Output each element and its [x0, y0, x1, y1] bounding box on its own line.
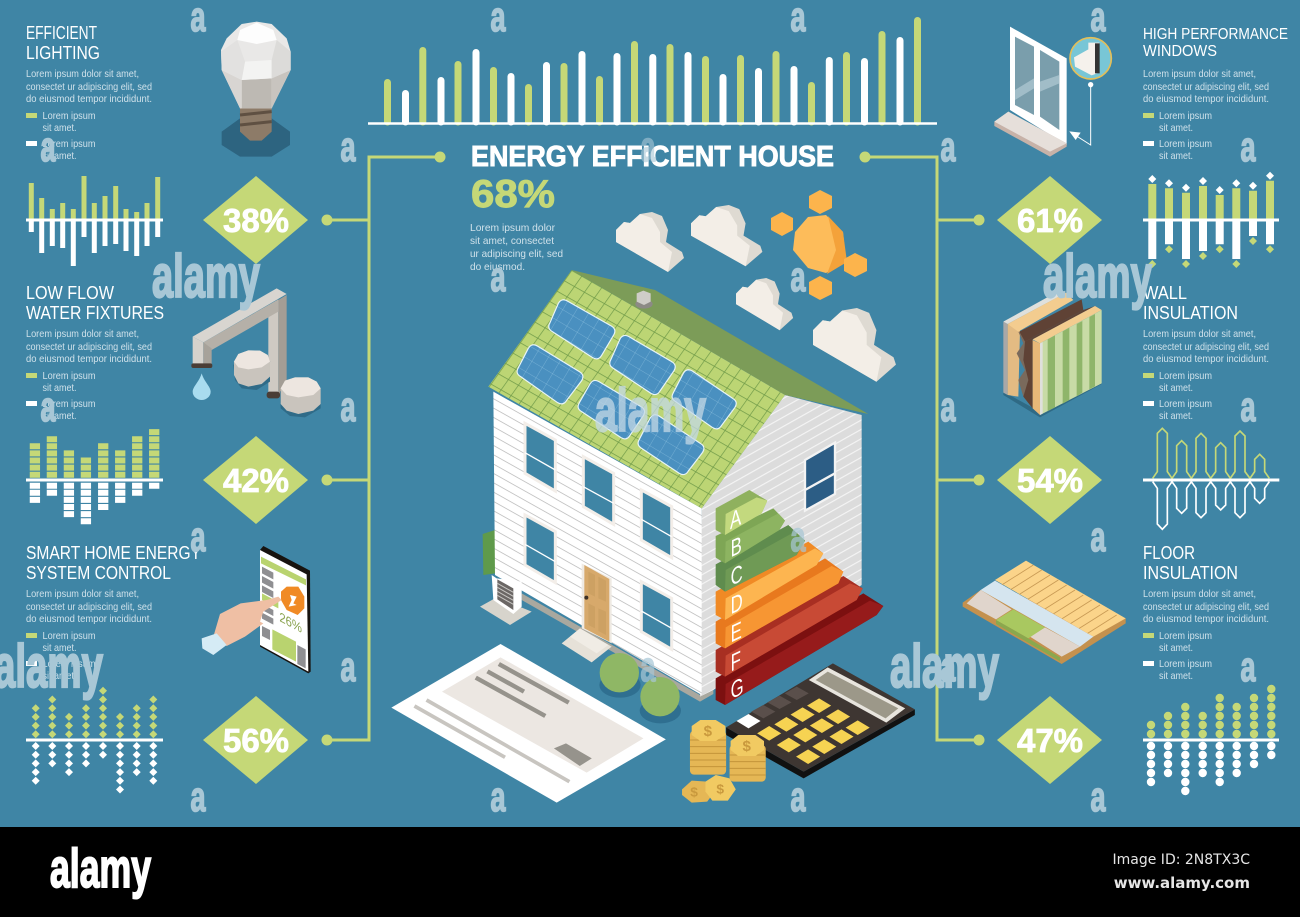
large watermark logos: alamy [595, 377, 706, 444]
text block: efficient lighting: Lorem ipsum [42, 110, 96, 122]
text block: floor insulation: sit amet. [1159, 642, 1193, 654]
footer logo: alamy [50, 837, 151, 899]
percentage diamond 47%: 47% [1017, 722, 1083, 759]
text block: efficient lighting: LIGHTING [26, 43, 100, 63]
percentage diamond 61% [997, 176, 1102, 264]
text block: floor insulation [1143, 543, 1269, 682]
icon: window with callout [994, 27, 1111, 157]
text block: floor insulation: Lorem ipsum [1159, 658, 1212, 670]
garden bushes [599, 653, 681, 723]
text block: efficient lighting: Lorem ipsum [42, 138, 96, 150]
text block: low flow water fixtures: Lorem ipsum [42, 398, 96, 410]
text block: floor insulation: FLOOR [1143, 543, 1195, 563]
text block: low flow water fixtures [26, 283, 164, 422]
icon: light bulb [221, 22, 291, 157]
energy rating arrows: B [731, 531, 742, 563]
text block: smart home energy system control: do eiusmod tempor incididunt. [26, 613, 152, 625]
icon: smartphone with hand [202, 546, 311, 673]
icon: water fixture [191, 288, 321, 417]
text block: high performance windows: do eiusmod tempor incididunt. [1143, 93, 1269, 105]
cloud 3 [736, 278, 793, 330]
coin stacks: $ [704, 724, 713, 740]
text block: floor insulation: Lorem ipsum [1159, 630, 1212, 642]
icon: floor insulation layers [963, 561, 1126, 664]
text block: low flow water fixtures: WATER FIXTURES [26, 303, 164, 323]
text block: efficient lighting: consectet ur adipiscing elit, sed [26, 81, 152, 93]
watermark letters: a [640, 643, 656, 690]
icon: sun [771, 190, 867, 300]
text block: low flow water fixtures: Lorem ipsum dolor sit amet, [26, 328, 139, 340]
coin stacks: $ [690, 785, 698, 800]
percentage diamond 56%: 56% [223, 722, 289, 759]
watermark letters: a [790, 513, 806, 560]
bush behind house [483, 530, 495, 575]
watermark letters: a [340, 123, 356, 170]
text block: smart home energy system control: sit amet. [42, 642, 76, 654]
footer bar [0, 827, 1300, 917]
percentage diamond 42%: 42% [223, 462, 289, 499]
energy rating arrows: E [731, 616, 742, 648]
cloud 4 [813, 308, 896, 382]
energy rating arrows: D [731, 587, 743, 620]
text block: efficient lighting: sit amet. [42, 122, 76, 134]
energy rating arrows: A [730, 503, 742, 535]
text block: low flow water fixtures: consectet ur adipiscing elit, sed [26, 341, 152, 353]
text block: wall insulation: Lorem ipsum [1159, 398, 1212, 410]
watermark letters: a [490, 773, 506, 820]
text block: wall insulation: Lorem ipsum [1159, 370, 1212, 382]
watermark letters: a [490, 253, 506, 300]
text block: floor insulation: do eiusmod tempor incididunt. [1143, 613, 1269, 625]
text block: wall insulation: sit amet. [1159, 410, 1193, 422]
chart: floor insulation dots [1143, 689, 1279, 791]
text block: smart home energy system control [26, 543, 201, 682]
side wall [700, 395, 862, 697]
text block: high performance windows: Lorem ipsum [1159, 110, 1212, 122]
text block: smart home energy system control: consectet ur adipiscing elit, sed [26, 601, 152, 613]
text block: smart home energy system control: SYSTEM CONTROL [26, 563, 171, 583]
text block: low flow water fixtures: LOW FLOW [26, 283, 114, 303]
solar panels [517, 300, 736, 475]
energy rating arrows [716, 490, 883, 705]
text block: efficient lighting: Lorem ipsum dolor sit amet, [26, 68, 139, 80]
main description text: ur adipiscing elit, sed [470, 248, 563, 260]
percentage diamond 56% [203, 696, 308, 784]
watermark letters: a [940, 643, 956, 690]
text block: floor insulation: Lorem ipsum dolor sit amet, [1143, 588, 1256, 600]
text block: floor insulation: consectet ur adipiscing elit, sed [1143, 601, 1269, 613]
text block: wall insulation: consectet ur adipiscing elit, sed [1143, 341, 1269, 353]
bill document [391, 644, 666, 803]
watermark letters: a [1240, 123, 1256, 170]
percentage diamond 38% [203, 176, 308, 264]
text block: wall insulation: INSULATION [1143, 303, 1238, 323]
large watermark logos: alamy [890, 633, 999, 700]
text block: floor insulation: sit amet. [1159, 670, 1193, 682]
left connector lines [322, 152, 446, 746]
footer image id: Image ID: 2N8TX3C [1113, 852, 1250, 868]
percentage diamond 54%: 54% [1017, 462, 1083, 499]
roof vent [635, 291, 653, 309]
text block: efficient lighting: sit amet. [42, 150, 76, 162]
text block: wall insulation: WALL [1143, 283, 1187, 303]
text block: high performance windows: consectet ur adipiscing elit, sed [1143, 81, 1269, 93]
text block: floor insulation: INSULATION [1143, 563, 1238, 583]
cloud 2 [691, 205, 762, 266]
text block: low flow water fixtures: sit amet. [42, 382, 76, 394]
main description text [470, 222, 563, 273]
large watermark logos: alamy [1043, 243, 1152, 310]
footer url: www.alamy.com [1114, 874, 1250, 892]
percentage diamond 38%: 38% [223, 202, 289, 239]
calculator [726, 663, 915, 778]
energy rating arrows: G [731, 672, 744, 705]
text block: low flow water fixtures: Lorem ipsum [42, 370, 96, 382]
coin stacks [682, 720, 766, 803]
text block: wall insulation: Lorem ipsum dolor sit amet, [1143, 328, 1256, 340]
cloud 1 [616, 212, 684, 272]
roof back slope [572, 270, 868, 414]
icon: smartphone with hand: 26% [279, 609, 302, 636]
text block: high performance windows: sit amet. [1159, 122, 1193, 134]
chart: wall insulation outline waves [1143, 428, 1279, 529]
percentage diamond 61%: 61% [1017, 202, 1083, 239]
text block: smart home energy system control: SMART HOME ENERGY [26, 543, 201, 563]
text block: wall insulation [1143, 283, 1269, 422]
coin stacks: $ [716, 782, 725, 796]
house illustration [480, 270, 883, 723]
main description text: sit amet, consectet [470, 235, 554, 247]
side window [805, 443, 835, 511]
watermark letters: a [1090, 773, 1106, 820]
text block: low flow water fixtures: sit amet. [42, 410, 76, 422]
watermark letters: a [190, 513, 206, 560]
watermark letters: a [340, 383, 356, 430]
watermark letters: a [190, 773, 206, 820]
watermark letters: a [940, 123, 956, 170]
main description text: Lorem ipsum dolor [470, 222, 555, 234]
chart: windows bars with diamonds [1143, 172, 1279, 268]
right connector lines [860, 152, 984, 746]
percentage diamond 47% [997, 696, 1102, 784]
front windows [525, 423, 672, 649]
text block: high performance windows: WINDOWS [1143, 43, 1217, 60]
watermark letters: a [40, 383, 56, 430]
watermark letters: a [640, 123, 656, 170]
text block: smart home energy system control: sit amet. [42, 670, 76, 682]
main description text: do eiusmod. [470, 261, 525, 273]
watermark letters: a [1240, 383, 1256, 430]
text block: low flow water fixtures: do eiusmod tempor incididunt. [26, 353, 152, 365]
energy rating arrows: F [731, 646, 741, 677]
watermark letters: a [790, 773, 806, 820]
text block: efficient lighting: EFFICIENT [26, 23, 97, 43]
text block: efficient lighting: do eiusmod tempor incididunt. [26, 93, 152, 105]
watermark letters: a [940, 383, 956, 430]
door and steps [562, 563, 612, 662]
energy rating arrows: C [731, 559, 743, 592]
watermark letters: a [1090, 513, 1106, 560]
text block: wall insulation: do eiusmod tempor incididunt. [1143, 353, 1269, 365]
air conditioning unit [480, 575, 532, 625]
large watermark logos [0, 243, 1152, 700]
watermark letters: a [1240, 643, 1256, 690]
text block: smart home energy system control: Lorem ipsum [42, 630, 96, 642]
text block: smart home energy system control: Lorem ipsum dolor sit amet, [26, 588, 139, 600]
top bar chart [368, 20, 937, 124]
icon: wall insulation layers [1003, 289, 1102, 417]
watermark letters: a [790, 253, 806, 300]
chart: smart home diamond bars [26, 687, 163, 794]
main heading: energy efficient house: ENERGY EFFICIENT HOUSE [471, 141, 834, 173]
text block: smart home energy system control: Lorem ipsum [42, 658, 96, 670]
main percentage 68%: 68% [471, 173, 555, 216]
front wall [493, 392, 702, 695]
text block: high performance windows: sit amet. [1159, 150, 1193, 162]
watermark letters: a [340, 643, 356, 690]
text block: high performance windows [1143, 26, 1288, 162]
text block: wall insulation: sit amet. [1159, 382, 1193, 394]
percentage diamond 42% [203, 436, 308, 524]
watermark letters: a [40, 123, 56, 170]
percentage diamond 54% [997, 436, 1102, 524]
chart: lighting bars [26, 176, 163, 266]
chart: water fixtures block bars [26, 429, 163, 524]
text block: high performance windows: Lorem ipsum [1159, 138, 1212, 150]
text block: high performance windows: Lorem ipsum dolor sit amet, [1143, 68, 1256, 80]
house foundation [522, 593, 713, 702]
large watermark logos: alamy [152, 243, 260, 310]
roof tiles [488, 270, 785, 508]
text block: efficient lighting [26, 23, 152, 162]
coin stacks: $ [743, 739, 752, 755]
